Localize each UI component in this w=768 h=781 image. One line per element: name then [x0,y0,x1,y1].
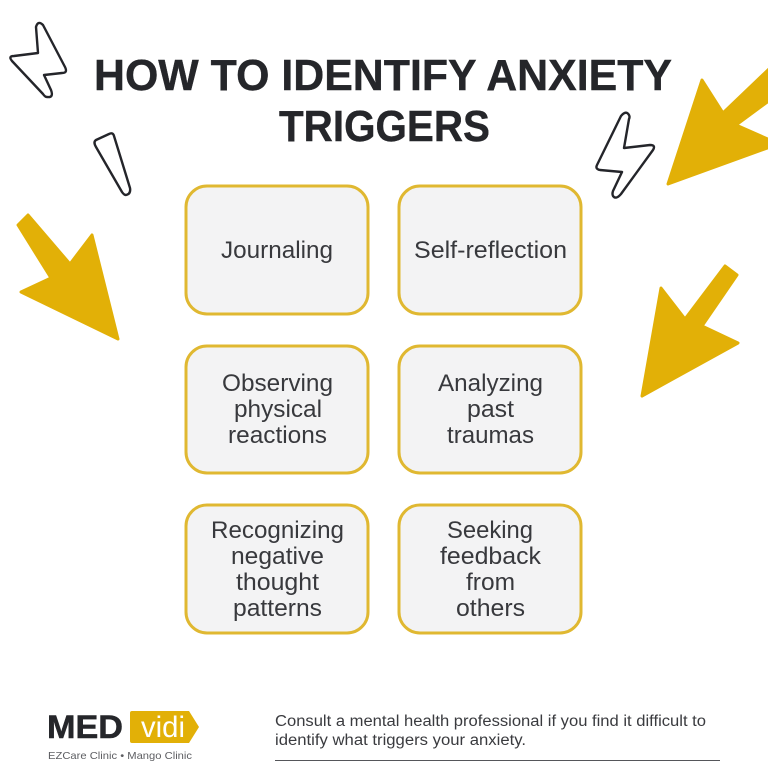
logo: medvidi [47,709,199,762]
panel: analyzing past traumas: traumas [447,422,534,449]
panel: analyzing past traumas: Analyzing [438,370,543,397]
panel: seeking feedback from others: others [456,595,525,622]
panel: self-reflection [399,186,581,314]
panel: analyzing past traumas [399,346,581,473]
panel: seeking feedback from others: feedback [440,543,542,570]
panel: observing physical reactions: Observing [222,370,333,397]
icon: outlined lightning bolt right [596,113,654,198]
panel: recognizing negative thought patterns: negative [231,543,324,570]
panel: observing physical reactions: reactions [228,422,327,449]
panel: analyzing past traumas: past [467,396,514,423]
arrow: yellow top right [668,68,768,184]
panel: recognizing negative thought patterns: patterns [233,595,322,622]
panel: seeking feedback from others [399,505,581,633]
panel: self-reflection: Self-reflection [414,237,567,264]
panel: journaling [186,186,368,314]
footer note: identify what triggers your anxiety. [275,732,526,749]
panel: recognizing negative thought patterns: thought [236,569,319,596]
title: TRIGGERS [279,102,490,151]
panel: journaling: Journaling [221,237,333,264]
logo: medvidi: MED [47,709,123,745]
logo: medvidi: EZCare Clinic • Mango Clinic [48,750,192,762]
panel: observing physical reactions: physical [234,396,322,423]
title [94,51,672,151]
icon: outlined wedge [94,133,130,195]
title: HOW TO IDENTIFY ANXIETY [94,51,672,100]
icon: outlined lightning bolt top left [10,23,66,97]
panel: recognizing negative thought patterns [186,505,368,633]
footer note: Consult a mental health professional if you find it difficult to [275,713,706,730]
footer note [275,713,706,749]
panel: seeking feedback from others: Seeking [447,517,533,544]
panel: observing physical reactions [186,346,368,473]
panel: recognizing negative thought patterns: Recognizing [211,517,344,544]
arrow: yellow left [18,215,118,339]
arrow: yellow lower right [642,266,738,396]
panel: seeking feedback from others: from [466,569,515,596]
logo: medvidi: vidi [141,711,185,744]
